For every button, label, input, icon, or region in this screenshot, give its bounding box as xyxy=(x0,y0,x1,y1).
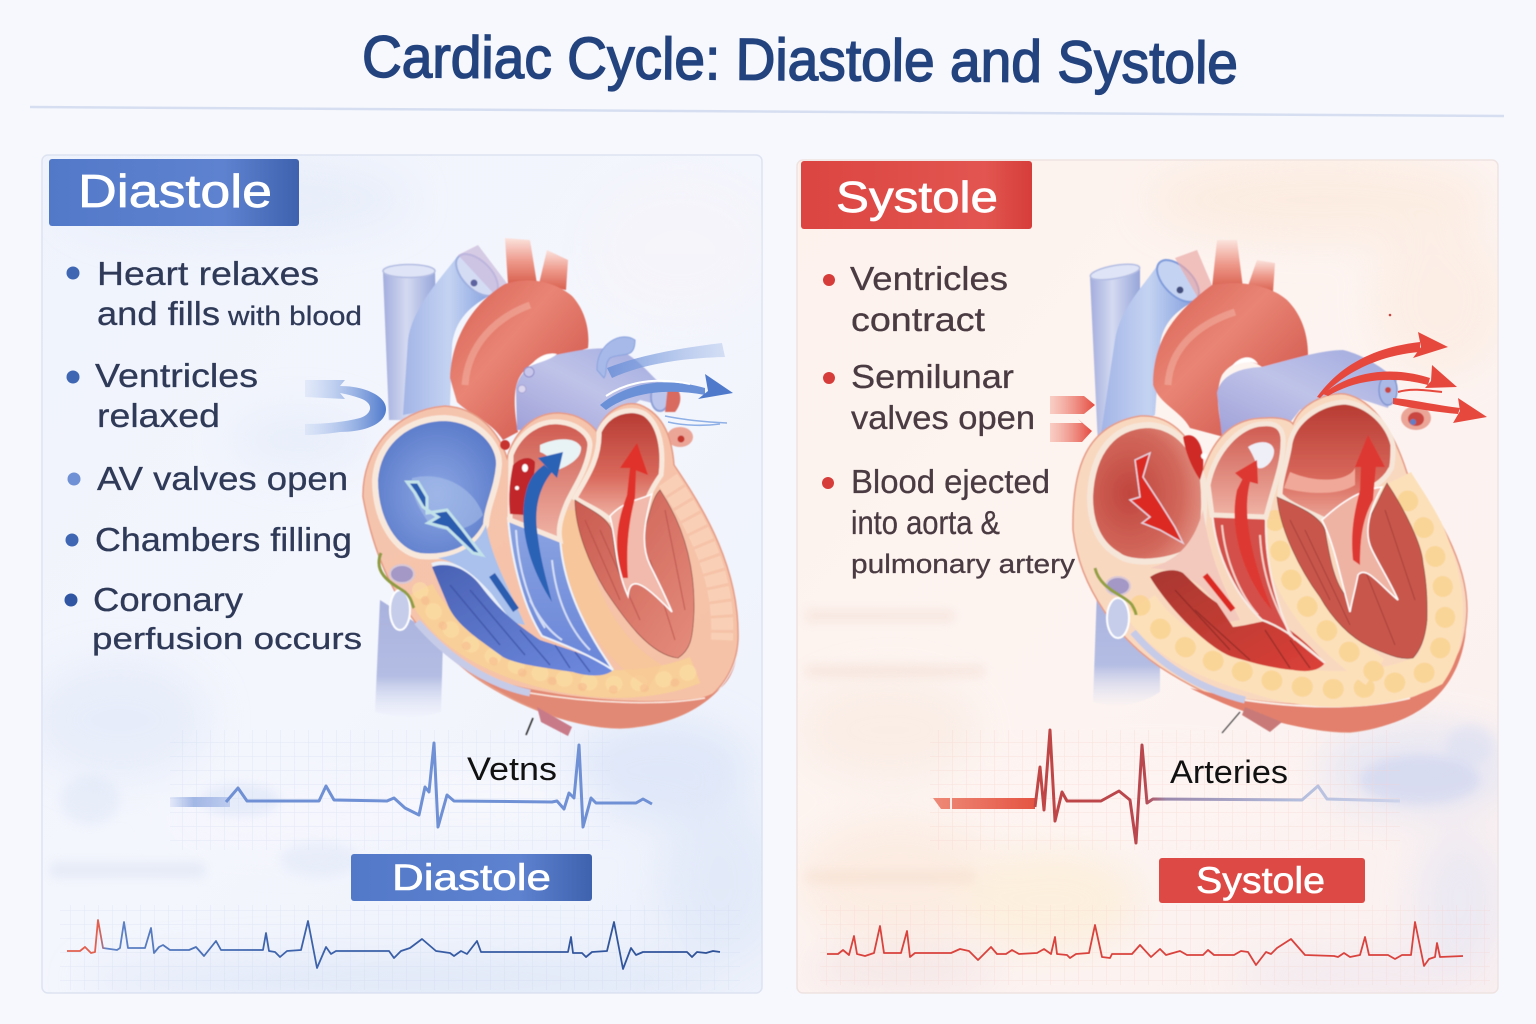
badge: systole small: Systole xyxy=(1196,860,1325,901)
fat layer xyxy=(1140,480,1445,689)
badge: diastole small xyxy=(351,854,592,901)
text block: systole bullets: contract xyxy=(851,301,985,338)
heading: diastole badge xyxy=(49,159,299,226)
text block: systole bullets xyxy=(822,260,1076,579)
blue outflow arrow xyxy=(523,452,563,602)
aortic branches xyxy=(458,238,568,295)
aortic arch highlight xyxy=(465,305,530,385)
text block: diastole bullets: relaxed xyxy=(97,397,220,434)
chart: upper ECG trace, veins xyxy=(170,743,652,827)
red inflow arrow xyxy=(1130,453,1183,543)
arrows: blood flow right of left heart xyxy=(600,343,733,425)
apex stem xyxy=(526,707,572,736)
pulmonary trunk xyxy=(516,337,693,447)
arrows: blood ejected xyxy=(1317,332,1487,423)
arrow: blood entering left heart xyxy=(305,380,386,435)
coronary vessel and sinuses xyxy=(379,553,414,630)
superior vena cava xyxy=(1089,261,1141,445)
inferior vena cava xyxy=(1093,590,1160,705)
text block: diastole bullets: with blood xyxy=(227,301,362,331)
heart base rim xyxy=(470,648,738,728)
arrows: blood entering right heart xyxy=(1050,396,1095,442)
white valve blob xyxy=(540,439,581,470)
text block: diastole bullets: AV valves open xyxy=(97,460,348,497)
septal column xyxy=(1212,509,1325,663)
heading: diastole badge: Diastole xyxy=(78,165,272,217)
illustration: heart in systole xyxy=(1073,240,1467,733)
arrow: upper xyxy=(1317,332,1448,398)
coronary vessel and sinuses xyxy=(1095,568,1136,638)
label: arteries: Arteries xyxy=(1170,754,1288,790)
badge: systole small xyxy=(1159,858,1365,903)
text block: systole bullets: into aorta & xyxy=(851,504,1000,541)
heading: systole badge xyxy=(801,161,1032,229)
fat layer xyxy=(420,480,722,689)
panel: systole xyxy=(797,160,1520,995)
blue inflow arrow xyxy=(407,482,482,555)
chart: lower ECG trace xyxy=(827,922,1463,966)
text block: diastole bullets xyxy=(64,255,362,656)
outflow tract xyxy=(1208,424,1283,517)
tricuspid wedge xyxy=(1150,510,1240,622)
illustration: heart in diastole xyxy=(363,238,738,736)
chart: lower ECG trace xyxy=(67,920,720,969)
text block: systole bullets: Blood ejected xyxy=(851,463,1050,500)
mitral leaflet column xyxy=(610,494,672,612)
aortic arch xyxy=(450,280,588,440)
heart wall xyxy=(363,404,738,728)
text block: systole bullets: valves open xyxy=(851,399,1035,436)
text block: diastole bullets: perfusion occurs xyxy=(92,621,362,656)
text block: diastole bullets: Chambers filling xyxy=(95,521,352,558)
white valve blob xyxy=(1248,442,1274,468)
left atrial ridge xyxy=(1284,468,1355,493)
text block: diastole bullets: Ventricles xyxy=(95,357,258,394)
aortic arch xyxy=(1153,283,1308,437)
text block: diastole bullets: Coronary xyxy=(93,581,244,618)
apex stem xyxy=(1222,707,1282,733)
mitral leaflet column xyxy=(1322,487,1398,612)
aortic branches xyxy=(1175,240,1275,298)
heart wall xyxy=(1073,394,1467,732)
red arrow xyxy=(1352,435,1385,565)
text block: systole bullets: Semilunar xyxy=(851,358,1014,395)
septal column xyxy=(508,515,613,670)
brachiocephalic vein xyxy=(1100,253,1206,440)
right atrium xyxy=(375,418,499,556)
red arrow xyxy=(617,443,648,578)
panel: diastole xyxy=(30,155,780,1002)
text block: diastole bullets: Heart relaxes xyxy=(97,255,319,292)
red outflow arrow xyxy=(1183,435,1272,610)
valve highlight xyxy=(412,476,483,530)
text block: diastole bullets: and fills xyxy=(97,295,220,332)
title: Cardiac Cycle: Diastole and Systole xyxy=(362,24,1238,96)
left ventricle xyxy=(1277,483,1427,658)
text block: systole bullets: Ventricles xyxy=(850,260,1008,297)
red patch xyxy=(509,458,535,515)
superior vena cava xyxy=(383,264,436,420)
label: veins: Vetns xyxy=(467,751,557,787)
text block: systole bullets: pulmonary artery xyxy=(851,549,1076,579)
outflow tract xyxy=(510,422,590,540)
chart: upper ECG trace, arteries xyxy=(933,730,1400,843)
left atrium xyxy=(1280,402,1393,530)
left atrium xyxy=(575,411,662,520)
right ventricle xyxy=(432,565,613,676)
heading: systole badge: Systole xyxy=(836,173,998,222)
arrow: lower xyxy=(1393,390,1487,423)
pulmonary trunk xyxy=(1217,350,1431,437)
badge: diastole small: Diastole xyxy=(392,857,551,898)
brachiocephalic vein xyxy=(403,247,505,415)
left ventricle xyxy=(575,490,694,658)
right ventricle xyxy=(1150,570,1325,671)
aortic arch highlight xyxy=(1168,312,1235,385)
arrow: middle xyxy=(1323,365,1457,396)
heart base rim xyxy=(1190,630,1466,732)
right atrium xyxy=(1090,425,1204,562)
inferior vena cava xyxy=(375,600,443,717)
tricuspid flow xyxy=(438,525,525,625)
